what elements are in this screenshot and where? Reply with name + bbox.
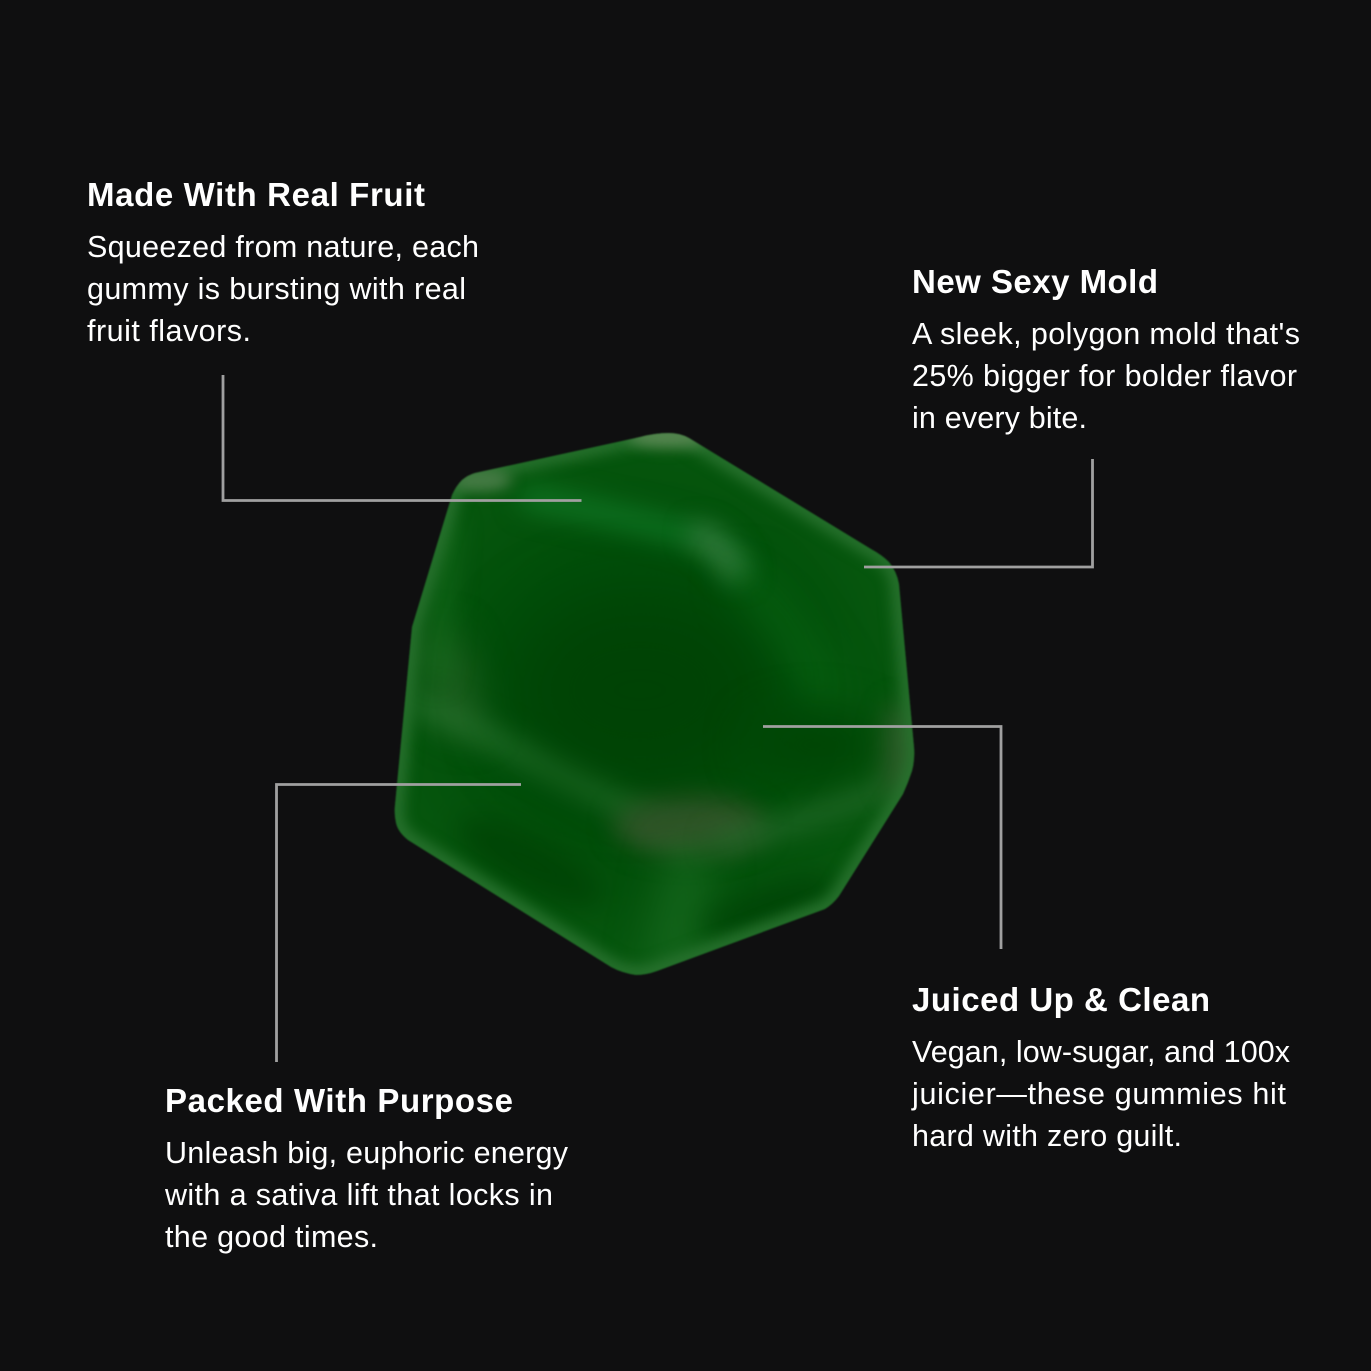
callout: New Sexy Mold: A sleek, polygon mold that's bbox=[912, 317, 1300, 351]
top corner glow bbox=[628, 424, 708, 448]
callout: Packed With Purpose: Packed With Purpose bbox=[165, 1082, 513, 1119]
brown highlight near lower centre bbox=[615, 795, 765, 855]
callout: New Sexy Mold: 25% bigger for bolder flavor bbox=[912, 359, 1297, 393]
lower-left band highlight bbox=[418, 695, 638, 816]
left soft patch bbox=[440, 650, 465, 715]
callout: Made With Real Fruit: Squeezed from nature, each bbox=[87, 230, 479, 264]
callout: Packed With Purpose bbox=[164, 1082, 569, 1254]
callout: Juiced Up & Clean: juicier—these gummies hit bbox=[911, 1077, 1287, 1111]
callout: Made With Real Fruit bbox=[87, 176, 479, 348]
callout: Made With Real Fruit: gummy is bursting with real bbox=[87, 272, 466, 306]
callout: Juiced Up & Clean: Vegan, low-sugar, and 100x bbox=[912, 1035, 1290, 1069]
callout: Juiced Up & Clean bbox=[911, 981, 1290, 1153]
callout: New Sexy Mold bbox=[912, 263, 1300, 435]
gummy illustration bbox=[380, 420, 930, 990]
right olive patch bbox=[882, 704, 918, 796]
callout: Packed With Purpose: Unleash big, euphoric energy bbox=[165, 1136, 569, 1170]
callout: Packed With Purpose: the good times. bbox=[165, 1220, 378, 1254]
callout: Juiced Up & Clean: Juiced Up & Clean bbox=[912, 981, 1210, 1018]
callout: Made With Real Fruit: fruit flavors. bbox=[87, 314, 251, 348]
callout: New Sexy Mold: in every bite. bbox=[912, 401, 1087, 435]
lower vertical facet bbox=[668, 862, 690, 965]
lower-right band bbox=[720, 785, 890, 842]
callout: Packed With Purpose: with a sativa lift that locks in bbox=[164, 1178, 553, 1212]
vertical left facet bbox=[438, 520, 448, 680]
leader line: purpose bbox=[276, 784, 521, 1062]
dark pockets bbox=[710, 878, 823, 930]
leader line: juiced up bbox=[763, 726, 1001, 949]
callout: Juiced Up & Clean: hard with zero guilt. bbox=[912, 1119, 1182, 1153]
callout: New Sexy Mold: New Sexy Mold bbox=[912, 263, 1158, 300]
leader line: real fruit bbox=[223, 375, 582, 500]
rim glow bbox=[395, 433, 914, 975]
callout: Made With Real Fruit: Made With Real Fruit bbox=[87, 176, 425, 213]
upper band highlight bbox=[530, 498, 738, 570]
leader line: sexy mold bbox=[864, 459, 1092, 567]
